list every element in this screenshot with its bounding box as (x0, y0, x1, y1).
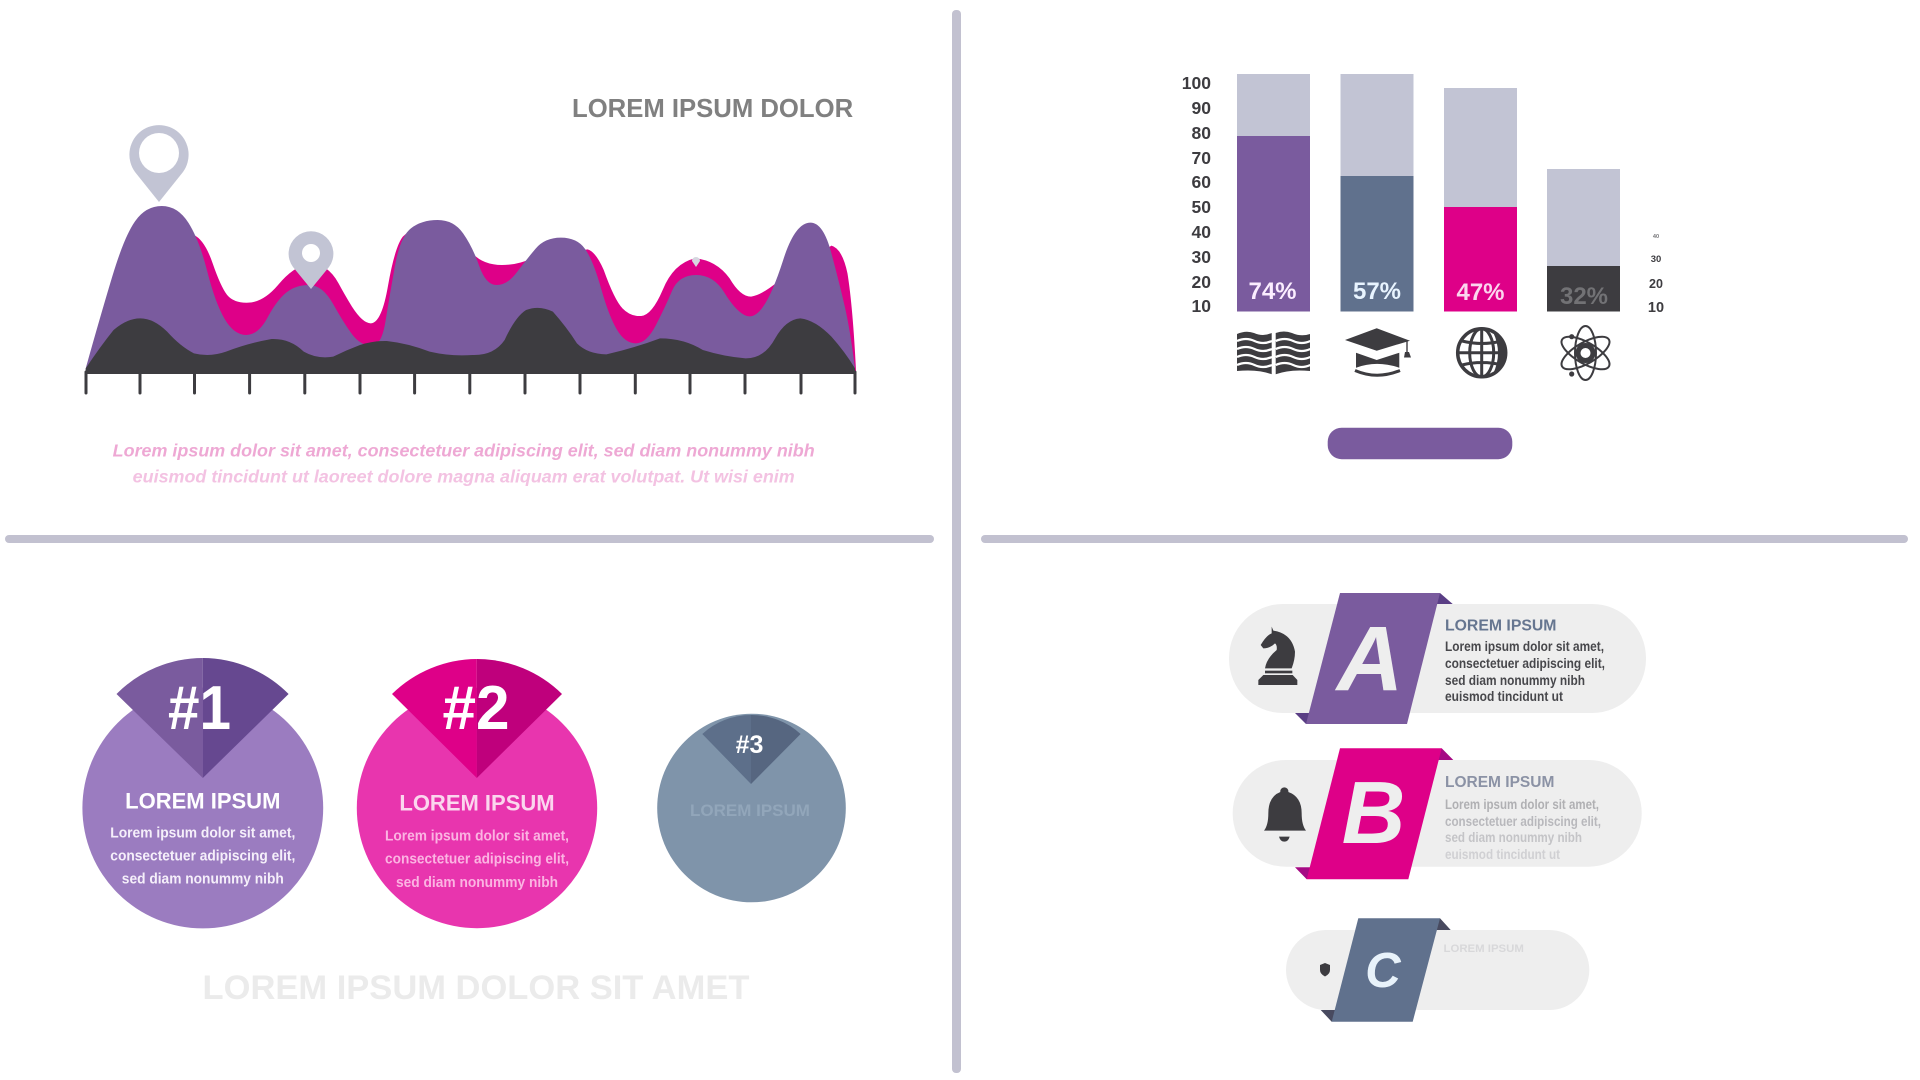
pill button (1328, 428, 1512, 459)
card: number 2: LOREM IPSUM (399, 791, 555, 816)
bar: 32 percent (1547, 169, 1620, 312)
icon: globe (1458, 329, 1506, 377)
bar: 74 percent: 74% (1248, 278, 1297, 305)
left axis labels: 80 (1192, 123, 1211, 143)
row A: sed diam nonummy nibh (1445, 673, 1585, 688)
caption: LOREM IPSUM DOLOR SIT AMET (203, 969, 749, 1007)
row B: consectetuer adipiscing elit, (1445, 814, 1601, 829)
left axis labels: 100 (1182, 73, 1211, 93)
icon: large map pin (129, 125, 189, 202)
row B: LOREM IPSUM (1445, 774, 1554, 791)
card: number 3: LOREM IPSUM (690, 801, 810, 820)
row B: Lorem ipsum dolor sit amet, (1445, 797, 1599, 812)
card: number 1: Lorem ipsum dolor sit amet, (110, 824, 295, 842)
description text (113, 440, 815, 486)
panel: area chart (86, 95, 856, 486)
card: number 2: Lorem ipsum dolor sit amet, (385, 828, 569, 844)
icon: book (1237, 332, 1310, 374)
card: number 2: sed diam nonummy nibh (396, 874, 558, 891)
icon: medium map pin (289, 231, 333, 289)
series: purple area (86, 206, 855, 372)
right axis labels: 20 (1649, 277, 1663, 291)
card: number 3 (657, 714, 846, 902)
bar: 47 percent: 47% (1456, 279, 1505, 306)
bar: 57 percent (1340, 74, 1414, 312)
right axis labels (1648, 234, 1664, 316)
left axis labels: 30 (1192, 247, 1211, 267)
icon: atom (1557, 326, 1614, 380)
card: number 1: consectetuer adipiscing elit, (110, 848, 295, 864)
row A (1229, 593, 1646, 724)
heading: lorem ipsum dolor: LOREM IPSUM DOLOR (572, 95, 854, 123)
axis ticks (86, 372, 855, 393)
series: dark area (86, 308, 855, 372)
icon: tiny map pin (692, 257, 700, 267)
panel: lettered ribbons (1229, 593, 1646, 1022)
row A: consectetuer adipiscing elit, (1445, 656, 1605, 671)
left axis labels: 50 (1192, 197, 1211, 217)
row B: euismod tincidunt ut (1445, 847, 1560, 862)
row C: C (1365, 944, 1401, 998)
left axis labels (1182, 73, 1211, 316)
panel: ranked circles (82, 658, 846, 1007)
row B: sed diam nonummy nibh (1445, 830, 1582, 845)
row A: LOREM IPSUM (1445, 618, 1556, 634)
left axis labels: 10 (1192, 296, 1211, 316)
left axis labels: 40 (1192, 222, 1211, 242)
description text: Lorem ipsum dolor sit amet, consectetuer adipiscing elit, sed diam nonummy nibh (113, 440, 815, 460)
icon: shield (1320, 963, 1330, 976)
left axis labels: 60 (1192, 172, 1211, 192)
description text: euismod tincidunt ut laoreet dolore magna aliquam erat volutpat. Ut wisi enim (133, 466, 795, 486)
row A: Lorem ipsum dolor sit amet, (1445, 639, 1604, 654)
series: pink area (183, 227, 856, 372)
icon: graduation cap (1345, 328, 1411, 375)
left axis labels: 70 (1192, 148, 1211, 168)
area chart (86, 206, 856, 372)
card: number 1: #1 (168, 674, 231, 743)
right axis labels: 40 (1653, 234, 1659, 240)
panel: bar chart (1182, 73, 1664, 459)
card: number 1: LOREM IPSUM (125, 789, 280, 814)
card: number 2: consectetuer adipiscing elit, (385, 850, 569, 868)
bar: 32 percent: 32% (1560, 283, 1608, 310)
bar: 57 percent: 57% (1353, 278, 1401, 305)
row B: B (1342, 763, 1405, 862)
row B (1233, 748, 1642, 879)
row C (1286, 918, 1589, 1022)
card: number 2 (357, 659, 597, 928)
bar: 47 percent (1444, 88, 1517, 312)
row A: A (1335, 608, 1403, 710)
card: number 3: #3 (736, 731, 763, 759)
card: number 2: #2 (442, 674, 510, 743)
right axis labels: 10 (1648, 300, 1664, 316)
bar: 74 percent (1237, 74, 1310, 312)
row C: LOREM IPSUM (1444, 943, 1524, 955)
card: number 1 (82, 658, 323, 928)
icon: bell (1264, 787, 1306, 842)
left axis labels: 90 (1192, 98, 1211, 118)
row A: euismod tincidunt ut (1445, 689, 1563, 704)
right axis labels: 30 (1651, 254, 1661, 265)
left axis labels: 20 (1192, 272, 1211, 292)
card: number 1: sed diam nonummy nibh (122, 870, 284, 888)
icon: chess knight (1258, 627, 1297, 685)
